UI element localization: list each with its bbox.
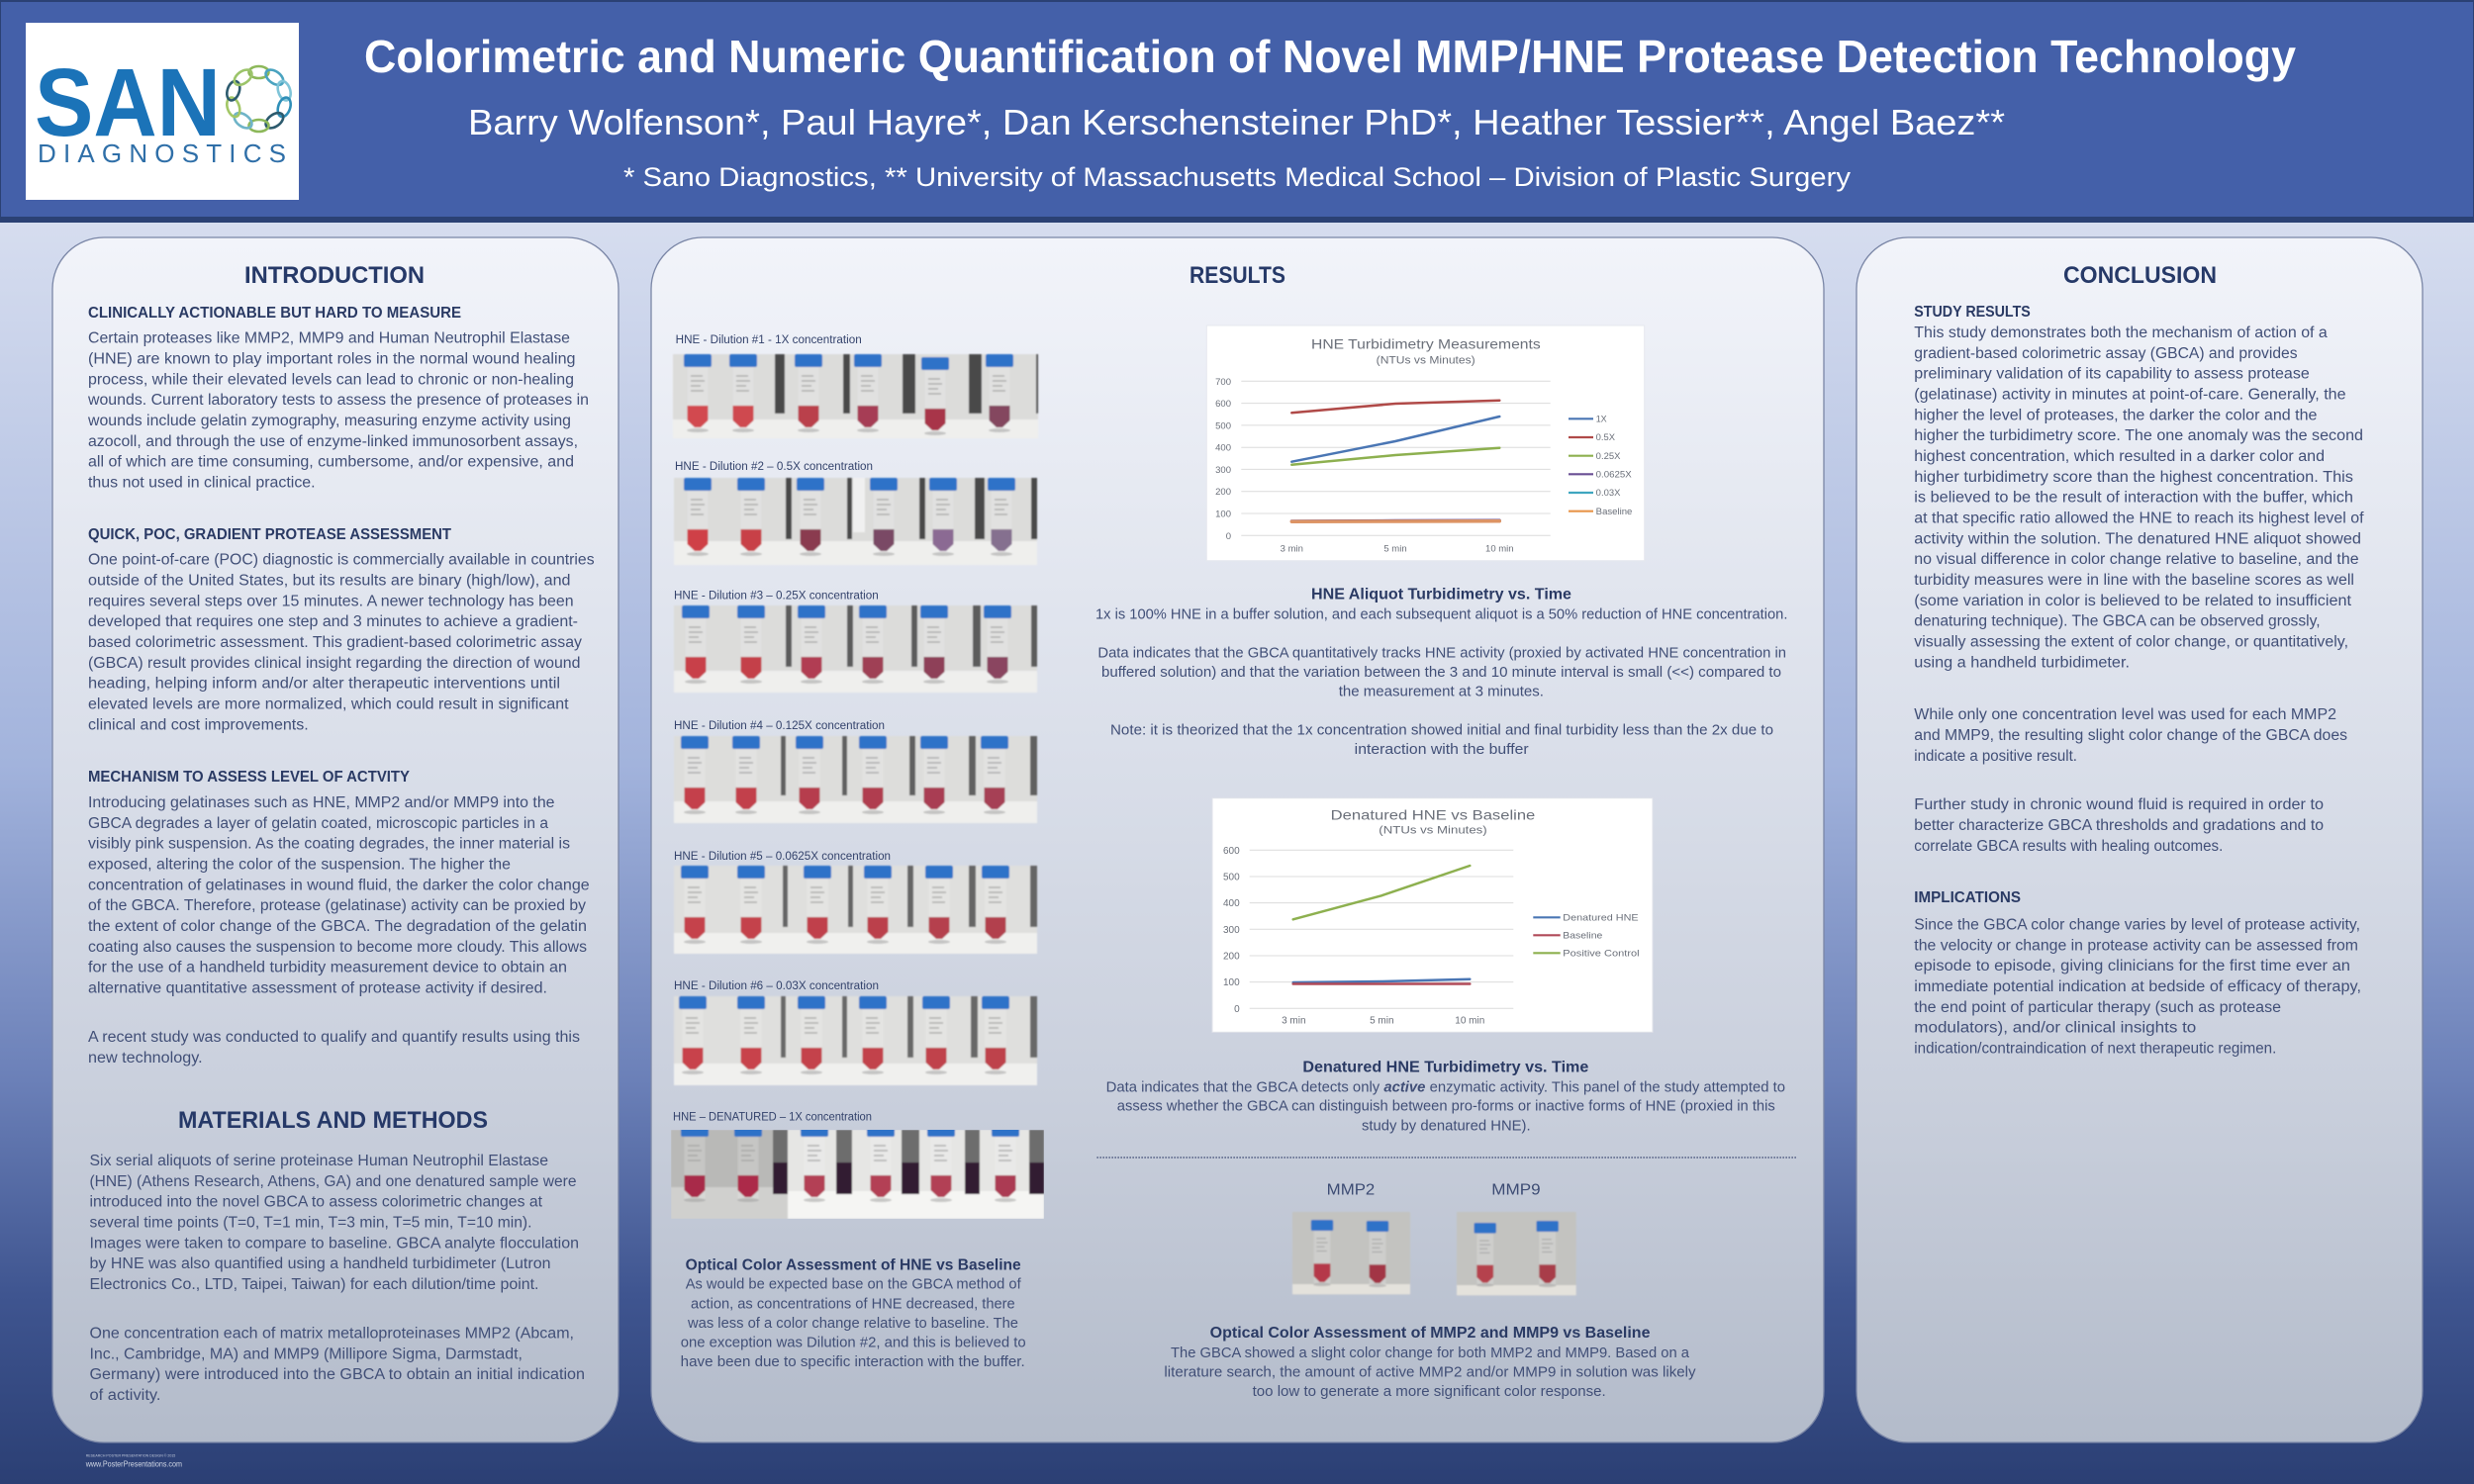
text block: implications: Since the GBCA color change varies by level of protease activity, (1914, 916, 2360, 934)
text block: recent study: new technology. (88, 1050, 203, 1067)
chart: HNE turbidimetry measurements: 1X (1596, 414, 1607, 423)
photo strip: dilution 5 (674, 851, 1037, 954)
chart: HNE turbidimetry measurements: 0.5X (1596, 432, 1615, 442)
photo strip: dilution 4 (674, 720, 1037, 823)
photo: MMP9: MMP9 (1491, 1182, 1541, 1199)
text block: recent study: A recent study was conducted to qualify and quantify results using this (88, 1029, 580, 1046)
text block: study results: turbidity measures were in line with the baseline scores as well (1914, 572, 2354, 589)
text block: HNE methods: Six serial aliquots of serine proteinase Human Neutrophil Elastase (89, 1153, 548, 1169)
text block: optical color assessment of MMP2 and MMP9: Optical Color Assessment of MMP2 and MMP9 vs Baseline (1210, 1325, 1651, 1342)
text block: mechanism: coating also causes the suspension to become more cloudy. This allows (88, 939, 587, 956)
text block: study results: higher turbidimetry score than the highest concentration. This (1914, 469, 2353, 486)
chart: denatured HNE vs baseline: 400 (1223, 898, 1240, 909)
chart: HNE turbidimetry measurements: 0.0625X (1596, 469, 1632, 479)
text block: mechanism (88, 769, 590, 997)
text block: HNE methods: Images were taken to compare to baseline. GBCA analyte flocculation (89, 1235, 579, 1252)
photo strip: dilution 3: HNE - Dilution #3 – 0.25X concentration (674, 591, 879, 603)
text block: HNE methods: (HNE) (Athens Research, Athens, GA) and one denatured sample were (89, 1173, 576, 1190)
text block: HNE aliquot turbidimetry: HNE Aliquot Turbidimetry vs. Time (1311, 587, 1571, 603)
text block: quick POC assessment: (GBCA) result provides clinical insight regarding the direction of wound (88, 655, 580, 672)
text block: implications: IMPLICATIONS (1914, 889, 2021, 906)
text block: implications (1914, 889, 2361, 1057)
text block: further study: Further study in chronic wound fluid is required in order to (1914, 796, 2324, 813)
text block: mechanism: of the GBCA. Therefore, protease (gelatinase) activity can be proxied by (88, 897, 586, 914)
text block: optical color assessment of HNE (681, 1256, 1026, 1370)
text block: MMP methods: One concentration each of matrix metalloproteinases MMP2 (Abcam, (89, 1326, 574, 1342)
footer credit (85, 1453, 182, 1468)
text block: HNE methods: Electronics Co., LTD, Taipei, Taiwan) for each dilution/time point. (89, 1276, 538, 1293)
chart: denatured HNE vs baseline: 300 (1223, 925, 1240, 936)
text block: quick POC assessment: requires several steps over 15 minutes. A newer technology has been (88, 593, 574, 609)
footer credit: www.PosterPresentations.com (85, 1459, 182, 1468)
chart: denatured HNE vs baseline: 100 (1223, 977, 1240, 988)
text block: mechanism: the extent of color change of the GBCA. The degradation of the gelatin (88, 918, 587, 935)
text block: implications: immediate potential indication at bedside of efficacy of therapy, (1914, 978, 2361, 995)
text block: denatured HNE turbidimetry (1106, 1059, 1785, 1135)
text block: MMP concentration note: and MMP9, the resulting slight color change of the GBCA does (1914, 727, 2347, 744)
text block: optical color assessment of MMP2 and MMP9: literature search, the amount of active MMP2 and/or MMP9 in solution was likely (1164, 1363, 1696, 1381)
text block: HNE methods: several time points (T=0, T=1 min, T=3 min, T=5 min, T=10 min). (89, 1215, 532, 1231)
photo strip: dilution 6 (674, 980, 1037, 1085)
chart: HNE turbidimetry measurements: 0.25X (1596, 451, 1620, 461)
text block: optical color assessment of HNE: action, as concentrations of HNE decreased, there (691, 1295, 1015, 1312)
text block: optical color assessment of MMP2 and MMP9: The GBCA showed a slight color change for both MMP2 and MMP9. Based on a (1171, 1345, 1690, 1361)
chart: denatured HNE vs baseline: 5 min (1370, 1015, 1394, 1026)
text block: study results: (gelatinase) activity in minutes at point-of-care. Generally, the (1914, 386, 2346, 404)
text block: MMP concentration note: indicate a positive result. (1914, 748, 2077, 765)
chart: denatured HNE vs baseline: Denatured HNE (1563, 913, 1639, 924)
text block: quick POC assessment: based colorimetric assessment. This gradient-based colorimetric assay (88, 634, 582, 651)
text block: clinically actionable: (HNE) are known to play important roles in the normal wound healing (88, 350, 576, 368)
chart: HNE turbidimetry measurements: 300 (1215, 465, 1231, 476)
panel: conclusion (1856, 237, 2423, 1442)
text block: optical color assessment of HNE: have been due to specific interaction with the buffer. (681, 1353, 1025, 1370)
chart: denatured HNE vs baseline: Denatured HNE vs Baseline (1331, 806, 1536, 822)
panel: results (651, 237, 1824, 1442)
text block: HNE aliquot turbidimetry: the measurement at 3 minutes. (1339, 684, 1544, 700)
photo strip: dilution 4: HNE - Dilution #4 – 0.125X concentration (674, 720, 885, 732)
text block: optical color assessment of HNE: one exception was Dilution #2, and this is believed to (681, 1335, 1026, 1351)
chart: HNE turbidimetry measurements: 10 min (1485, 544, 1514, 555)
text block: clinically actionable: all of which are time consuming, cumbersome, and/or expensive, and (88, 454, 574, 471)
authors: Barry Wolfenson*, Paul Hayre*, Dan Kerschensteiner PhD*, Heather Tessier**, Angel Baez** (468, 102, 2005, 142)
text block: denatured HNE turbidimetry: assess whether the GBCA can distinguish between pro-forms or inactive forms of HNE (proxied in this (1117, 1097, 1775, 1114)
text block: HNE aliquot turbidimetry (1095, 587, 1787, 758)
text block: study results: at that specific ratio allowed the HNE to reach its highest level of (1914, 510, 2364, 526)
heading: materials and methods: MATERIALS AND METHODS (178, 1107, 488, 1134)
panel: introduction and methods (52, 237, 618, 1442)
chart: HNE turbidimetry measurements: 200 (1215, 487, 1231, 498)
chart: denatured HNE vs baseline (1212, 798, 1653, 1032)
text block: HNE methods (89, 1153, 579, 1293)
photo: MMP2 (1292, 1182, 1410, 1294)
text block: optical color assessment of HNE: Optical Color Assessment of HNE vs Baseline (686, 1256, 1021, 1273)
chart: denatured HNE vs baseline: 600 (1223, 846, 1240, 857)
chart: HNE turbidimetry measurements (1206, 325, 1645, 561)
photo: MMP2: MMP2 (1327, 1182, 1375, 1199)
logo: Sano Diagnostics: DIAGNOSTICS (38, 139, 286, 168)
text block: clinically actionable: wounds include gelatin zymography, measuring enzyme activity using (87, 413, 571, 429)
title: Colorimetric and Numeric Quantification of Novel MMP/HNE Protease Detection Technology (364, 31, 2296, 82)
chart: denatured HNE vs baseline: 500 (1223, 873, 1240, 882)
text block: study results: using a handheld turbidimeter. (1914, 654, 2130, 671)
text block: mechanism: concentration of gelatinases in wound fluid, the darker the color change (88, 877, 590, 893)
chart: HNE turbidimetry measurements: (NTUs vs Minutes) (1377, 355, 1475, 367)
photo strip: dilution 6: HNE - Dilution #6 – 0.03X concentration (674, 980, 879, 992)
text block: quick POC assessment: elevated levels are more normalized, which could result in significant (88, 696, 569, 712)
text block: HNE aliquot turbidimetry: 1x is 100% HNE in a buffer solution, and each subsequent aliquot is a 50% reduction of HNE concentration. (1095, 606, 1787, 623)
text block: study results: higher the turbidimetry score. The one anomaly was the second (1914, 427, 2363, 444)
text block: clinically actionable: thus not used in clinical practice. (88, 475, 316, 491)
text block: mechanism: for the use of a handheld turbidity measurement device to obtain an (88, 960, 567, 976)
text block: quick POC assessment: developed that requires one step and 3 minutes to achieve a gradient- (88, 613, 578, 630)
text block: implications: episode to episode, giving clinicians for the first time ever an (1914, 958, 2350, 974)
chart: HNE turbidimetry measurements: 5 min (1383, 544, 1407, 555)
text block: quick POC assessment: outside of the United States, but its results are binary (high/low), and (88, 572, 570, 590)
text block: optical color assessment of HNE: As would be expected base on the GBCA method of (686, 1276, 1022, 1293)
text block: HNE aliquot turbidimetry: Note: it is theorized that the 1x concentration showed initial and final turbidity less than the 2x due to (1110, 721, 1773, 738)
text block: clinically actionable: Certain proteases like MMP2, MMP9 and Human Neutrophil Elastase (88, 330, 570, 347)
text block: quick POC assessment: One point-of-care (POC) diagnostic is commercially available in countries (88, 552, 595, 569)
chart: HNE turbidimetry measurements: 0 (1226, 531, 1231, 542)
text block: quick POC assessment: heading, helping inform and/or alter therapeutic interventions until (88, 676, 560, 693)
text block: quick POC assessment: QUICK, POC, GRADIENT PROTEASE ASSESSMENT (88, 526, 452, 543)
chart: denatured HNE vs baseline: 200 (1223, 952, 1240, 962)
text block: HNE methods: introduced into the novel GBCA to assess colorimetric changes at (89, 1194, 543, 1211)
text block: quick POC assessment (88, 526, 595, 733)
text block: clinically actionable: process, while their elevated levels can lead to chronic or non-healing (88, 371, 574, 388)
text block: MMP concentration note: While only one concentration level was used for each MMP2 (1914, 706, 2336, 723)
text block: study results: preliminary validation of its capability to assess protease (1914, 366, 2310, 383)
photo strip: dilution 3 (674, 591, 1037, 693)
text block: study results: STUDY RESULTS (1914, 304, 2031, 321)
text block: mechanism: MECHANISM TO ASSESS LEVEL OF ACTVITY (88, 769, 411, 786)
text block: study results: activity within the solution. The denatured HNE aliquot showed (1914, 530, 2361, 547)
header banner (0, 0, 2474, 223)
text block: further study: correlate GBCA results with healing outcomes. (1914, 838, 2223, 855)
photo: MMP9 (1457, 1182, 1576, 1295)
text block: implications: the end point of particular therapy (such as protease (1914, 999, 2281, 1016)
text block: mechanism: exposed, altering the color of the suspension. The higher the (88, 857, 511, 873)
heading: conclusion: CONCLUSION (2063, 262, 2217, 289)
text block: MMP methods: Germany) were introduced into the GBCA to obtain an initial indication (89, 1366, 585, 1383)
chart: denatured HNE vs baseline: 3 min (1282, 1015, 1306, 1026)
chart: HNE turbidimetry measurements: 0.03X (1596, 488, 1620, 498)
chart: denatured HNE vs baseline: (NTUs vs Minutes) (1379, 825, 1487, 837)
text block: mechanism: Introducing gelatinases such as HNE, MMP2 and/or MMP9 into the (88, 794, 554, 811)
photo strip: dilution 2: HNE - Dilution #2 – 0.5X concentration (675, 461, 873, 473)
text block: denatured HNE turbidimetry: Data indicates that the GBCA detects only active enzymatic activity. This panel of the study attempted to (1106, 1078, 1785, 1095)
text block: MMP concentration note (1914, 706, 2347, 765)
text block: optical color assessment of MMP2 and MMP9 (1164, 1325, 1696, 1400)
text block: HNE aliquot turbidimetry: interaction with the buffer (1355, 741, 1529, 758)
logo: Sano Diagnostics (26, 23, 299, 200)
photo strip: denatured (671, 1112, 1044, 1219)
text block: HNE aliquot turbidimetry: buffered solution) and that the variation between the 3 and 10 minute interval is small (<<) compared to (1101, 664, 1781, 681)
text block: further study: better characterize GBCA thresholds and gradations and to (1914, 817, 2324, 834)
chart: denatured HNE vs baseline: Baseline (1563, 931, 1602, 942)
text block: study results: visually assessing the extent of color change, or quantitatively, (1914, 633, 2348, 651)
text block: mechanism: visibly pink suspension. As the coating degrades, the inner material is (88, 836, 570, 853)
chart: HNE turbidimetry measurements: 600 (1215, 399, 1231, 410)
text block: HNE methods: by HNE was also quantified using a handheld turbidimeter (Lutron (89, 1255, 550, 1272)
text block: mechanism: GBCA degrades a layer of gelatin coated, microscopic particles in a (88, 815, 548, 832)
chart: HNE turbidimetry measurements: 400 (1215, 443, 1231, 454)
text block: clinically actionable: azocoll, and through the use of enzyme-linked immunosorbent assays, (88, 433, 578, 450)
text block: implications: the velocity or change in protease activity can be assessed from (1914, 937, 2358, 954)
text block: denatured HNE turbidimetry: Denatured HNE Turbidimetry vs. Time (1302, 1059, 1589, 1075)
text block: MMP methods (89, 1326, 585, 1404)
text block: denatured HNE turbidimetry: study by denatured HNE). (1362, 1118, 1531, 1135)
text block: optical color assessment of MMP2 and MMP9: too low to generate a more significant color response. (1253, 1383, 1606, 1400)
text block: optical color assessment of HNE: was less of a color change relative to baseline. The (687, 1315, 1018, 1332)
chart: denatured HNE vs baseline: Positive Control (1563, 949, 1640, 960)
text block: recent study (88, 1029, 580, 1067)
heading: results: RESULTS (1189, 262, 1285, 289)
photo strip: dilution 1 (673, 334, 1038, 438)
text block: study results: is believed to be the result of interaction with the buffer, which (1914, 490, 2353, 507)
text block: quick POC assessment: clinical and cost improvements. (88, 716, 309, 733)
photo strip: dilution 1: HNE - Dilution #1 - 1X concentration (676, 334, 862, 346)
chart: denatured HNE vs baseline: 0 (1234, 1004, 1240, 1015)
text block: further study (1914, 796, 2324, 855)
chart: HNE turbidimetry measurements: 100 (1215, 509, 1231, 520)
text block: mechanism: alternative quantitative assessment of protease activity if desired. (88, 979, 547, 997)
text block: clinically actionable (87, 305, 589, 491)
text block: HNE aliquot turbidimetry: Data indicates that the GBCA quantitatively tracks HNE activity (proxied by activated HNE concentration in (1097, 644, 1786, 661)
text block: study results: highest concentration, which resulted in a darker color and (1914, 448, 2325, 465)
text block: study results: no visual difference in color change relative to baseline, and the (1914, 551, 2359, 568)
chart: HNE turbidimetry measurements: 3 min (1281, 544, 1303, 555)
text block: MMP methods: Inc., Cambridge, MA) and MMP9 (Millipore Sigma, Darmstadt, (89, 1345, 523, 1362)
photo strip: dilution 5: HNE - Dilution #5 – 0.0625X concentration (674, 851, 891, 863)
text block: clinically actionable: CLINICALLY ACTIONABLE BUT HARD TO MEASURE (88, 305, 461, 322)
text block: study results (1914, 304, 2364, 671)
text block: study results: (some variation in color is believed to be related to insufficient (1914, 593, 2352, 609)
photo strip: denatured: HNE – DENATURED – 1X concentration (673, 1112, 872, 1124)
text block: study results: This study demonstrates both the mechanism of action of a (1914, 325, 2328, 341)
text block: MMP methods: of activity. (89, 1387, 160, 1404)
chart: HNE turbidimetry measurements: Baseline (1596, 507, 1632, 516)
text block: study results: gradient-based colorimetric assay (GBCA) and provides (1914, 345, 2298, 362)
chart: HNE turbidimetry measurements: 500 (1215, 420, 1231, 431)
text block: study results: denaturing technique). The GBCA can be observed grossly, (1914, 613, 2321, 630)
chart: HNE turbidimetry measurements: HNE Turbidimetry Measurements (1311, 336, 1541, 352)
heading: introduction: INTRODUCTION (244, 262, 425, 289)
text block: clinically actionable: wounds. Current laboratory tests to assess the presence of proteases in (87, 392, 589, 409)
affiliations: * Sano Diagnostics, ** University of Massachusetts Medical School – Division of Plastic Surgery (623, 162, 1852, 192)
text block: study results: higher the level of proteases, the darker the color and the (1914, 407, 2318, 423)
chart: HNE turbidimetry measurements: 700 (1215, 377, 1231, 388)
text block: implications: modulators), and/or clinical insights to (1914, 1020, 2196, 1037)
photo strip: dilution 2 (674, 461, 1037, 565)
text block: implications: indication/contraindication of next therapeutic regimen. (1914, 1041, 2276, 1057)
logo: Sano Diagnostics: SAN (35, 48, 221, 156)
chart: denatured HNE vs baseline: 10 min (1455, 1015, 1484, 1026)
footer credit: RESEARCH POSTER PRESENTATION DESIGN © 2015 (86, 1453, 176, 1458)
